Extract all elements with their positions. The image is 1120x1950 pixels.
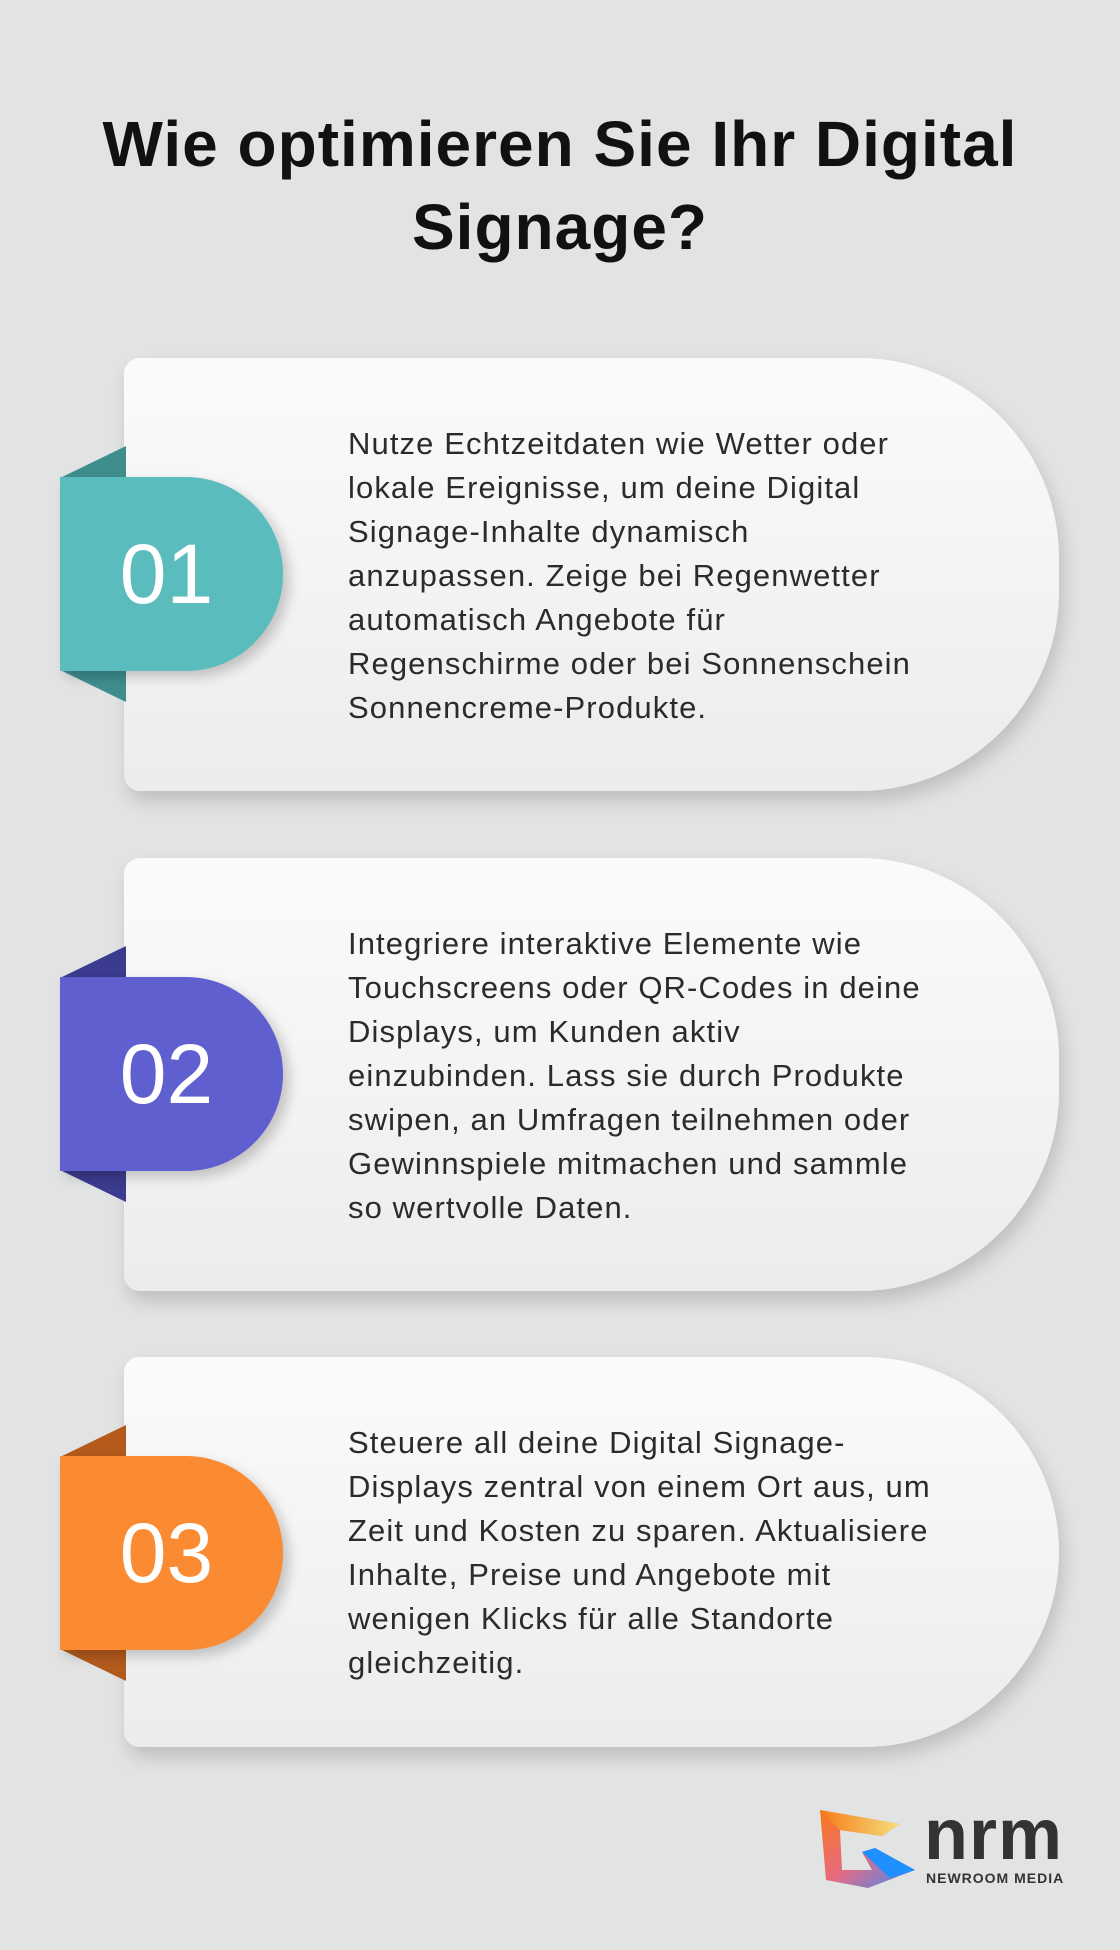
icon: tab 01 bbox=[60, 446, 294, 702]
title bbox=[102, 108, 1017, 263]
text block 1: automatisch Angebote für bbox=[348, 602, 726, 637]
text block 3: gleichzeitig. bbox=[348, 1645, 524, 1680]
logo: nrm bbox=[924, 1795, 1063, 1875]
text block 1: Nutze Echtzeitdaten wie Wetter oder bbox=[348, 426, 889, 461]
text block 1 bbox=[348, 426, 911, 725]
text block 1: Regenschirme oder bei Sonnenschein bbox=[348, 646, 911, 681]
icon: tab 02 bbox=[60, 946, 294, 1202]
panel: card 3 bbox=[124, 1357, 1059, 1747]
text block 3: wenigen Klicks für alle Standorte bbox=[348, 1601, 834, 1636]
text block 2: so wertvolle Daten. bbox=[348, 1190, 633, 1225]
text block 2: Integriere interaktive Elemente wie bbox=[348, 926, 862, 961]
text block 2 bbox=[348, 926, 921, 1225]
text block 1: Signage-Inhalte dynamisch bbox=[348, 514, 749, 549]
text block 2: Displays, um Kunden aktiv bbox=[348, 1014, 741, 1049]
text block 1: anzupassen. Zeige bei Regenwetter bbox=[348, 558, 881, 593]
logo: NEWROOM MEDIA bbox=[926, 1870, 1064, 1886]
title: Signage? bbox=[412, 191, 708, 263]
text block 3 bbox=[348, 1425, 931, 1680]
text block 3: Displays zentral von einem Ort aus, um bbox=[348, 1469, 931, 1504]
text block 3: Steuere all deine Digital Signage- bbox=[348, 1425, 846, 1460]
panel: card 1 bbox=[124, 358, 1059, 791]
text block 2: swipen, an Umfragen teilnehmen oder bbox=[348, 1102, 910, 1137]
panel: card 2 bbox=[124, 858, 1059, 1291]
text block 2: Touchscreens oder QR-Codes in deine bbox=[348, 970, 921, 1005]
text block 1: Sonnencreme-Produkte. bbox=[348, 690, 707, 725]
text block 2: einzubinden. Lass sie durch Produkte bbox=[348, 1058, 905, 1093]
icon: tab 03 bbox=[60, 1425, 294, 1681]
logo bbox=[820, 1795, 1064, 1888]
text block 1: lokale Ereignisse, um deine Digital bbox=[348, 470, 860, 505]
icon: tab 02: 02 bbox=[120, 1027, 213, 1121]
text block 3: Zeit und Kosten zu sparen. Aktualisiere bbox=[348, 1513, 929, 1548]
icon: tab 01: 01 bbox=[120, 527, 213, 621]
icon: tab 03: 03 bbox=[120, 1506, 213, 1600]
title: Wie optimieren Sie Ihr Digital bbox=[103, 108, 1017, 180]
text block 3: Inhalte, Preise und Angebote mit bbox=[348, 1557, 831, 1592]
text block 2: Gewinnspiele mitmachen und sammle bbox=[348, 1146, 908, 1181]
